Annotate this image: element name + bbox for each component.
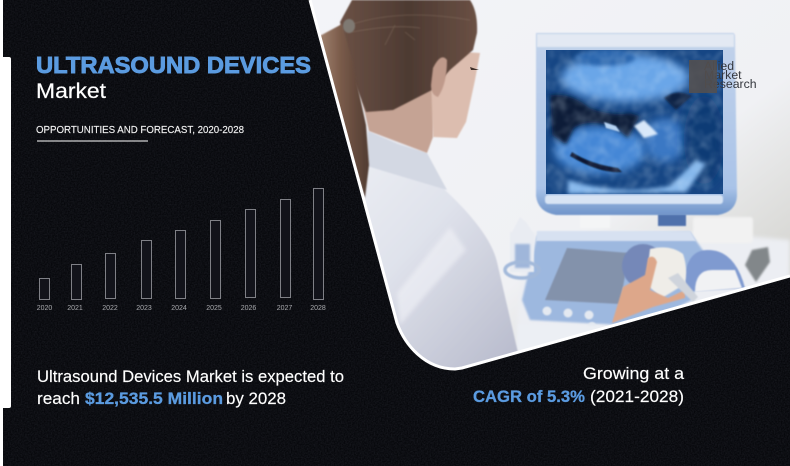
CAGR callout (473, 365, 685, 406)
lab coat (365, 168, 518, 368)
console body (522, 232, 704, 326)
subtitle underline (37, 140, 148, 142)
hand and probe (612, 244, 698, 323)
photo panel: sonographer at ultrasound machine (300, 0, 790, 370)
bar chart (37, 188, 326, 312)
market size callout (37, 368, 344, 408)
year labels (37, 305, 326, 312)
monitor stand (580, 212, 610, 228)
left white edge (0, 0, 11, 466)
bottle holder (505, 262, 539, 278)
callout value: $12,535.5 Million (85, 390, 223, 408)
watermark text: Research (704, 77, 757, 91)
probe holder (685, 250, 745, 292)
ultrasound scan image (546, 50, 724, 194)
neck (362, 85, 435, 153)
ultrasound console (505, 217, 790, 362)
year labels: 2027 (277, 305, 292, 312)
year labels: 2026 (241, 305, 256, 312)
CAGR line one: Growing at a (583, 365, 685, 383)
year labels: 2024 (171, 305, 187, 312)
watermark logo square (689, 60, 717, 93)
desk and side unit (528, 236, 790, 327)
hair tie (343, 19, 355, 33)
hand (612, 257, 685, 323)
console screen (545, 248, 629, 304)
probe neck (668, 273, 698, 302)
watermark text: Allied (704, 59, 734, 73)
console knobs (542, 306, 596, 324)
title: ultrasound devices: ULTRASOUND DEVICES (36, 52, 311, 78)
CAGR value: CAGR of 5.3% (473, 388, 585, 406)
ponytail (316, 24, 369, 198)
year labels: 2023 (136, 305, 152, 312)
gel bottle (528, 246, 535, 273)
clinic wall (300, 0, 790, 370)
year labels: 2021 (67, 305, 83, 312)
eye (470, 67, 479, 70)
face (430, 50, 480, 138)
bars (40, 188, 324, 300)
probe head (622, 244, 656, 284)
collar (367, 131, 447, 190)
callout line one: Ultrasound Devices Market is expected to (37, 368, 344, 386)
photo white border (310, 0, 790, 369)
monitor (536, 33, 757, 228)
watermark (689, 59, 757, 93)
year labels: 2022 (102, 305, 118, 312)
callout line two: reach: reach (37, 390, 80, 408)
keypad (518, 324, 612, 354)
year labels: 2020 (37, 305, 52, 312)
title (36, 52, 311, 103)
coat fold (397, 227, 466, 325)
callout line two: year: by 2028 (226, 390, 286, 408)
hair (340, 0, 477, 112)
year labels: 2028 (310, 305, 326, 312)
rear probes (745, 247, 770, 282)
monitor frame (536, 33, 737, 215)
watermark text: Market (704, 68, 742, 82)
CAGR period: (2021-2028) (590, 388, 684, 406)
hair strands (350, 15, 470, 45)
ear (431, 57, 447, 97)
subtitle: OPPORTUNITIES AND FORECAST, 2020-2028 (36, 124, 244, 136)
woman (321, 0, 518, 368)
year labels: 2025 (206, 305, 222, 312)
title: market: Market (36, 80, 106, 103)
